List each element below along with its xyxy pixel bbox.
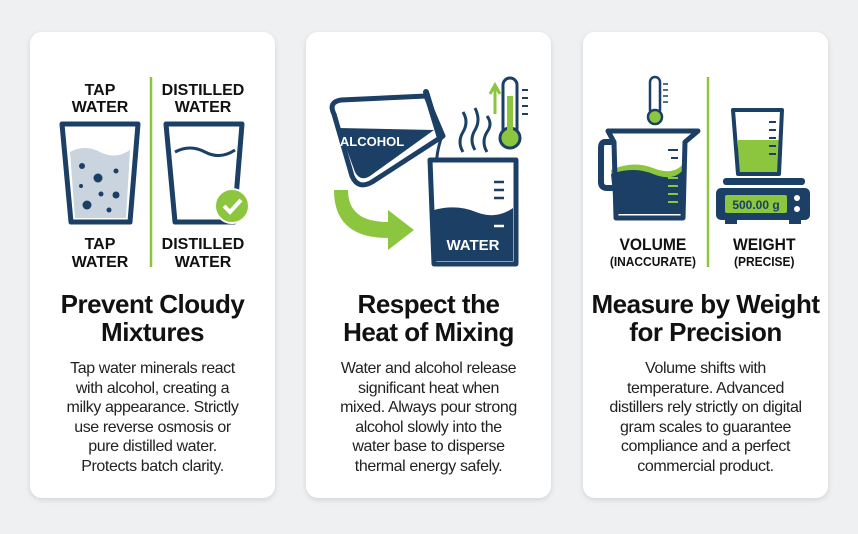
icon: tap vs distilled water glasses: TAP: [85, 82, 116, 99]
icon: pouring alcohol into water: [330, 76, 528, 266]
text block: [67, 360, 239, 475]
text block: pure distilled water.: [88, 438, 217, 455]
icon: tap vs distilled water glasses: WATER: [175, 254, 232, 271]
icon: volume jug vs scale: [598, 76, 810, 269]
heading: for Precision: [629, 317, 782, 347]
heading: [61, 289, 245, 347]
text block: use reverse osmosis or: [74, 419, 231, 436]
heading: [592, 289, 820, 347]
icon: tap vs distilled water glasses: WATER: [175, 99, 232, 116]
icon: volume jug vs scale: (INACCURATE): [610, 255, 696, 269]
heading: Heat of Mixing: [343, 317, 514, 347]
icon: tap vs distilled water glasses: DISTILLED: [162, 82, 244, 99]
text block: compliance and a perfect: [621, 438, 790, 455]
text block: Protects batch clarity.: [81, 458, 224, 475]
icon: pouring alcohol into water: WATER: [446, 237, 500, 254]
icon: volume jug vs scale: 500.00 g: [732, 198, 780, 212]
text block: milky appearance. Strictly: [67, 399, 238, 416]
text block: [340, 360, 517, 475]
text block: commercial product.: [637, 458, 774, 475]
text block: with alcohol, creating a: [76, 380, 229, 397]
text block: Tap water minerals react: [70, 360, 235, 377]
text block: Water and alcohol release: [341, 360, 516, 377]
heading: Respect the: [358, 289, 499, 319]
icon: tap vs distilled water glasses: TAP: [85, 236, 116, 253]
text block: alcohol slowly into the: [355, 419, 502, 436]
text block: Volume shifts with: [645, 360, 766, 377]
icon: volume jug vs scale: WEIGHT: [733, 235, 796, 254]
panel: heat of mixing: [306, 32, 551, 498]
text block: significant heat when: [358, 380, 499, 397]
heading: Prevent Cloudy: [61, 289, 244, 319]
heading: Mixtures: [101, 317, 204, 347]
text block: [609, 360, 802, 475]
text block: thermal energy safely.: [355, 458, 502, 475]
panel: measure by weight: [583, 32, 828, 498]
panel: prevent cloudy mixtures: [30, 32, 275, 498]
icon: tap vs distilled water glasses: [60, 77, 248, 271]
text block: gram scales to guarantee: [620, 419, 791, 436]
icon: pouring alcohol into water: ALCOHOL: [340, 134, 404, 149]
icon: volume jug vs scale: (PRECISE): [734, 255, 794, 269]
text block: distillers rely strictly on digital: [609, 399, 802, 416]
heading: [343, 289, 514, 347]
icon: volume jug vs scale: VOLUME: [619, 235, 686, 254]
text block: water base to disperse: [352, 438, 505, 455]
icon: tap vs distilled water glasses: WATER: [72, 99, 129, 116]
icon: tap vs distilled water glasses: WATER: [72, 254, 129, 271]
text block: mixed. Always pour strong: [340, 399, 517, 416]
text block: temperature. Advanced: [627, 380, 784, 397]
icon: tap vs distilled water glasses: DISTILLED: [162, 236, 244, 253]
heading: Measure by Weight: [592, 289, 819, 319]
